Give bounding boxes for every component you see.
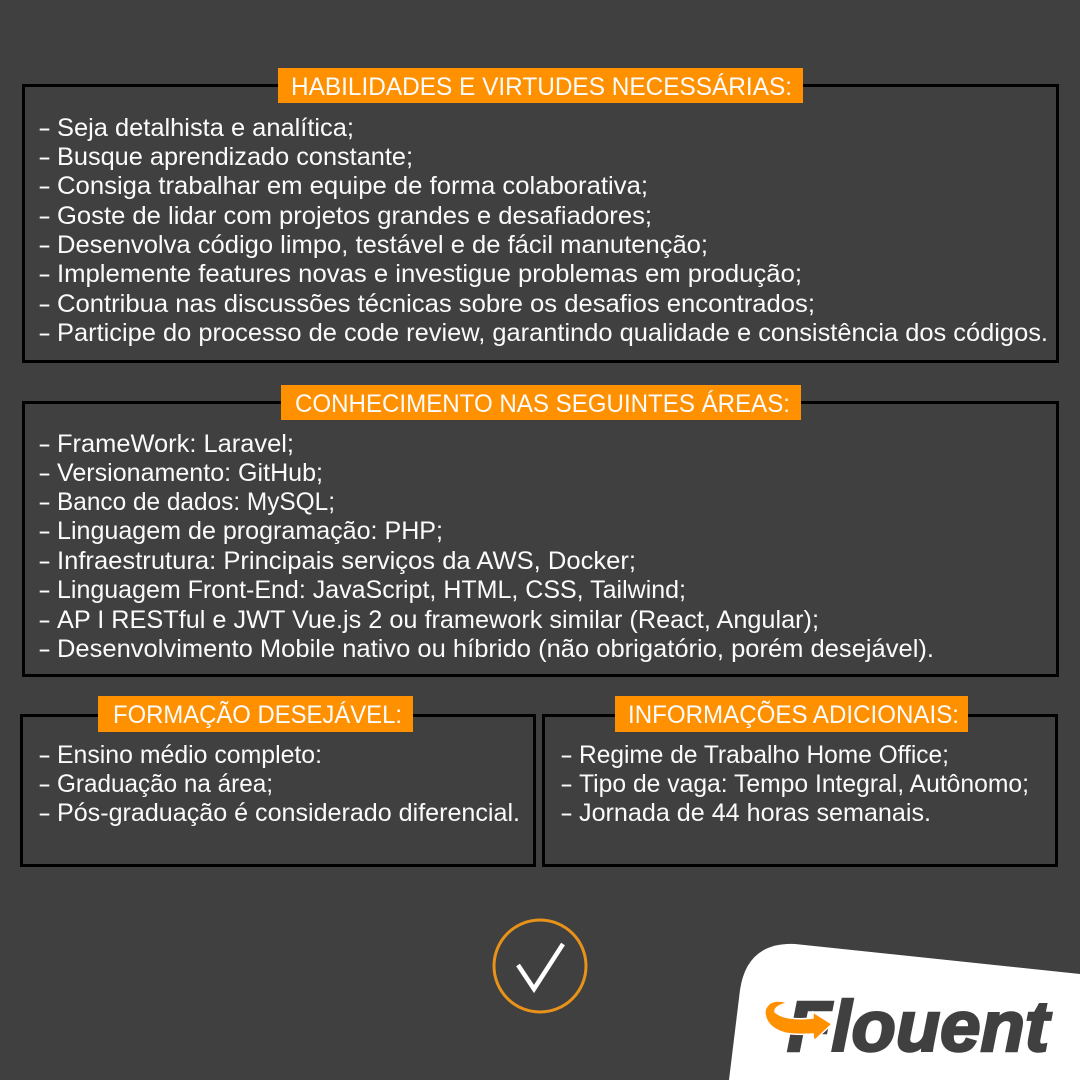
icon: check mark in circle bbox=[494, 920, 586, 1012]
panel: habilidades e virtudes bbox=[24, 68, 1058, 362]
panel: conhecimento bbox=[24, 385, 1058, 676]
list: habilidades bbox=[38, 114, 1048, 347]
panel: formação desejável bbox=[22, 696, 534, 866]
list: formação: Graduação na área; bbox=[57, 770, 273, 798]
list: habilidades: Seja detalhista e analítica; bbox=[57, 114, 354, 142]
logo panel: white corner bbox=[729, 944, 1080, 1080]
icon: orange curved arrow bbox=[765, 1001, 832, 1041]
heading: formação: FORMAÇÃO DESEJÁVEL: bbox=[113, 700, 402, 729]
list: conhecimento: - bbox=[38, 635, 51, 663]
list: formação: - bbox=[38, 770, 51, 798]
list: informações: Jornada de 44 horas semanais. bbox=[579, 799, 931, 827]
list: informações: - bbox=[560, 799, 573, 827]
list: conhecimento: FrameWork: Laravel; bbox=[57, 430, 294, 458]
list: habilidades: Goste de lidar com projetos grandes e desafiadores; bbox=[57, 202, 652, 230]
list: informações bbox=[560, 741, 1029, 827]
list: formação: Pós-graduação é considerado diferencial. bbox=[57, 799, 520, 827]
logo: Flouent wordmark: Flouent bbox=[787, 988, 1052, 1067]
list: informações: - bbox=[560, 741, 573, 769]
list: habilidades: - bbox=[38, 319, 51, 347]
list: habilidades: Consiga trabalhar em equipe de forma colaborativa; bbox=[57, 172, 648, 200]
list: conhecimento: Linguagem de programação: PHP; bbox=[57, 517, 443, 545]
list: formação: - bbox=[38, 799, 51, 827]
list: habilidades: - bbox=[38, 172, 51, 200]
list: habilidades: Participe do processo de code review, garantindo qualidade e consistência dos códigos. bbox=[57, 319, 1048, 347]
list: habilidades: - bbox=[38, 231, 51, 259]
list: informações: - bbox=[560, 770, 573, 798]
list: habilidades: Implemente features novas e investigue problemas em produção; bbox=[57, 260, 802, 288]
list: conhecimento: - bbox=[38, 488, 51, 516]
list: habilidades: - bbox=[38, 260, 51, 288]
list: conhecimento: Linguagem Front-End: JavaScript, HTML, CSS, Tailwind; bbox=[57, 576, 686, 604]
list: conhecimento: AP I RESTful e JWT Vue.js 2 ou framework similar (React, Angular); bbox=[57, 606, 819, 634]
list: habilidades: Busque aprendizado constante; bbox=[57, 143, 413, 171]
list: conhecimento: - bbox=[38, 459, 51, 487]
list: conhecimento: - bbox=[38, 576, 51, 604]
list: habilidades: Desenvolva código limpo, testável e de fácil manutenção; bbox=[57, 231, 708, 259]
list: habilidades: - bbox=[38, 114, 51, 142]
list: habilidades: - bbox=[38, 290, 51, 318]
list: conhecimento: - bbox=[38, 430, 51, 458]
list: formação: Ensino médio completo: bbox=[57, 741, 322, 769]
list: formação: - bbox=[38, 741, 51, 769]
heading: habilidades: HABILIDADES E VIRTUDES NECESSÁRIAS: bbox=[291, 72, 792, 101]
list: informações: Tipo de vaga: Tempo Integral, Autônomo; bbox=[579, 770, 1029, 798]
list: habilidades: - bbox=[38, 143, 51, 171]
list: informações: Regime de Trabalho Home Office; bbox=[579, 741, 949, 769]
panel: informações adicionais bbox=[544, 696, 1056, 866]
heading: conhecimento: CONHECIMENTO NAS SEGUINTES ÁREAS: bbox=[295, 389, 790, 418]
list: conhecimento: - bbox=[38, 606, 51, 634]
list: conhecimento bbox=[38, 430, 934, 663]
list: conhecimento: Desenvolvimento Mobile nativo ou híbrido (não obrigatório, porém desejável). bbox=[57, 635, 934, 663]
list: formação bbox=[38, 741, 520, 827]
list: conhecimento: Banco de dados: MySQL; bbox=[57, 488, 335, 516]
list: conhecimento: Versionamento: GitHub; bbox=[57, 459, 323, 487]
list: conhecimento: Infraestrutura: Principais serviços da AWS, Docker; bbox=[57, 547, 636, 575]
list: habilidades: Contribua nas discussões técnicas sobre os desafios encontrados; bbox=[57, 290, 815, 318]
heading: informações: INFORMAÇÕES ADICIONAIS: bbox=[628, 700, 959, 729]
list: conhecimento: - bbox=[38, 547, 51, 575]
list: habilidades: - bbox=[38, 202, 51, 230]
list: conhecimento: - bbox=[38, 517, 51, 545]
